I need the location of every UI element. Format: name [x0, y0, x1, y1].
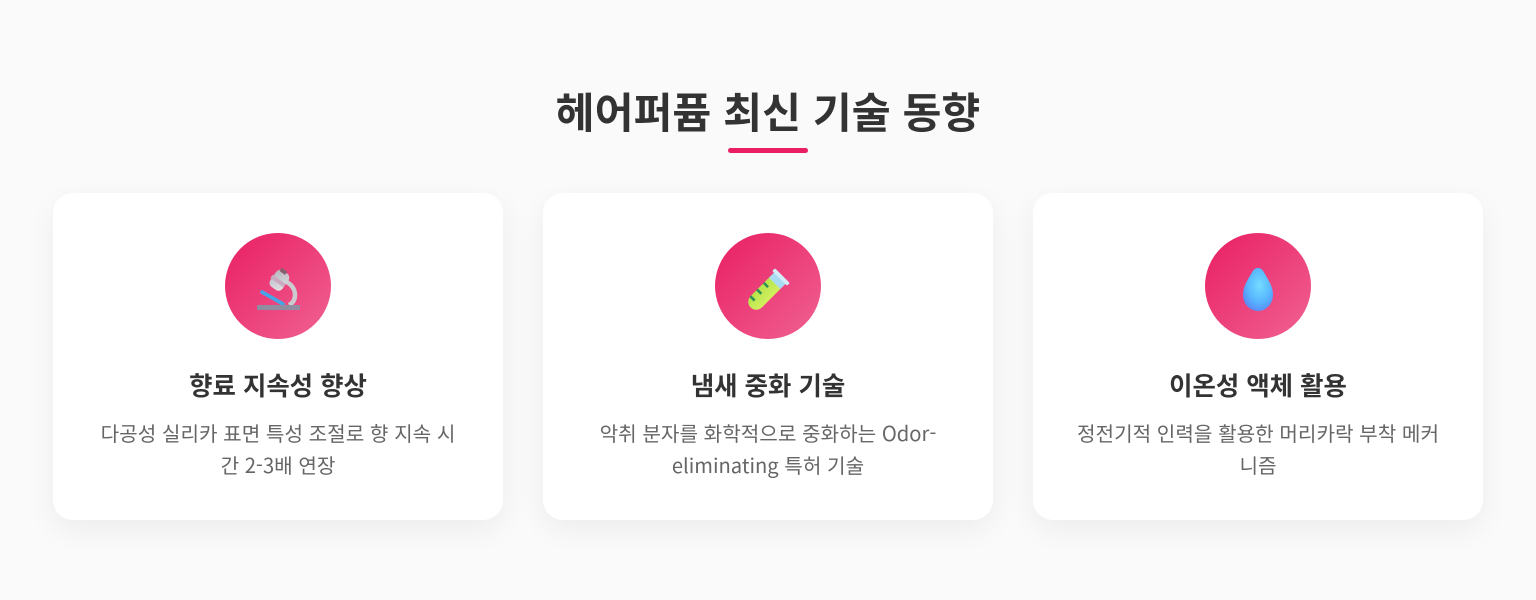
card heading: 이온성 액체 활용 — [1169, 367, 1347, 403]
icon: test tube — [715, 233, 821, 339]
icon: microscope — [225, 233, 331, 339]
card heading: 향료 지속성 향상 — [189, 367, 367, 403]
title underline — [728, 148, 808, 153]
card text: 정전기적 인력을 활용한 머리카락 부착 메커니즘 — [1077, 418, 1439, 479]
panel: ionic liquid card — [1033, 193, 1483, 520]
title: 헤어퍼퓸 최신 기술 동향 — [556, 80, 980, 141]
card text: 다공성 실리카 표면 특성 조절로 향 지속 시간 2-3배 연장 — [101, 418, 455, 479]
panel: fragrance longevity card — [53, 193, 503, 520]
icon: water drop — [1205, 233, 1311, 339]
card heading: 냄새 중화 기술 — [691, 367, 845, 403]
card text: 악취 분자를 화학적으로 중화하는 Odor-eliminating 특허 기술 — [600, 418, 936, 479]
panel: odor neutralization card — [543, 193, 993, 520]
